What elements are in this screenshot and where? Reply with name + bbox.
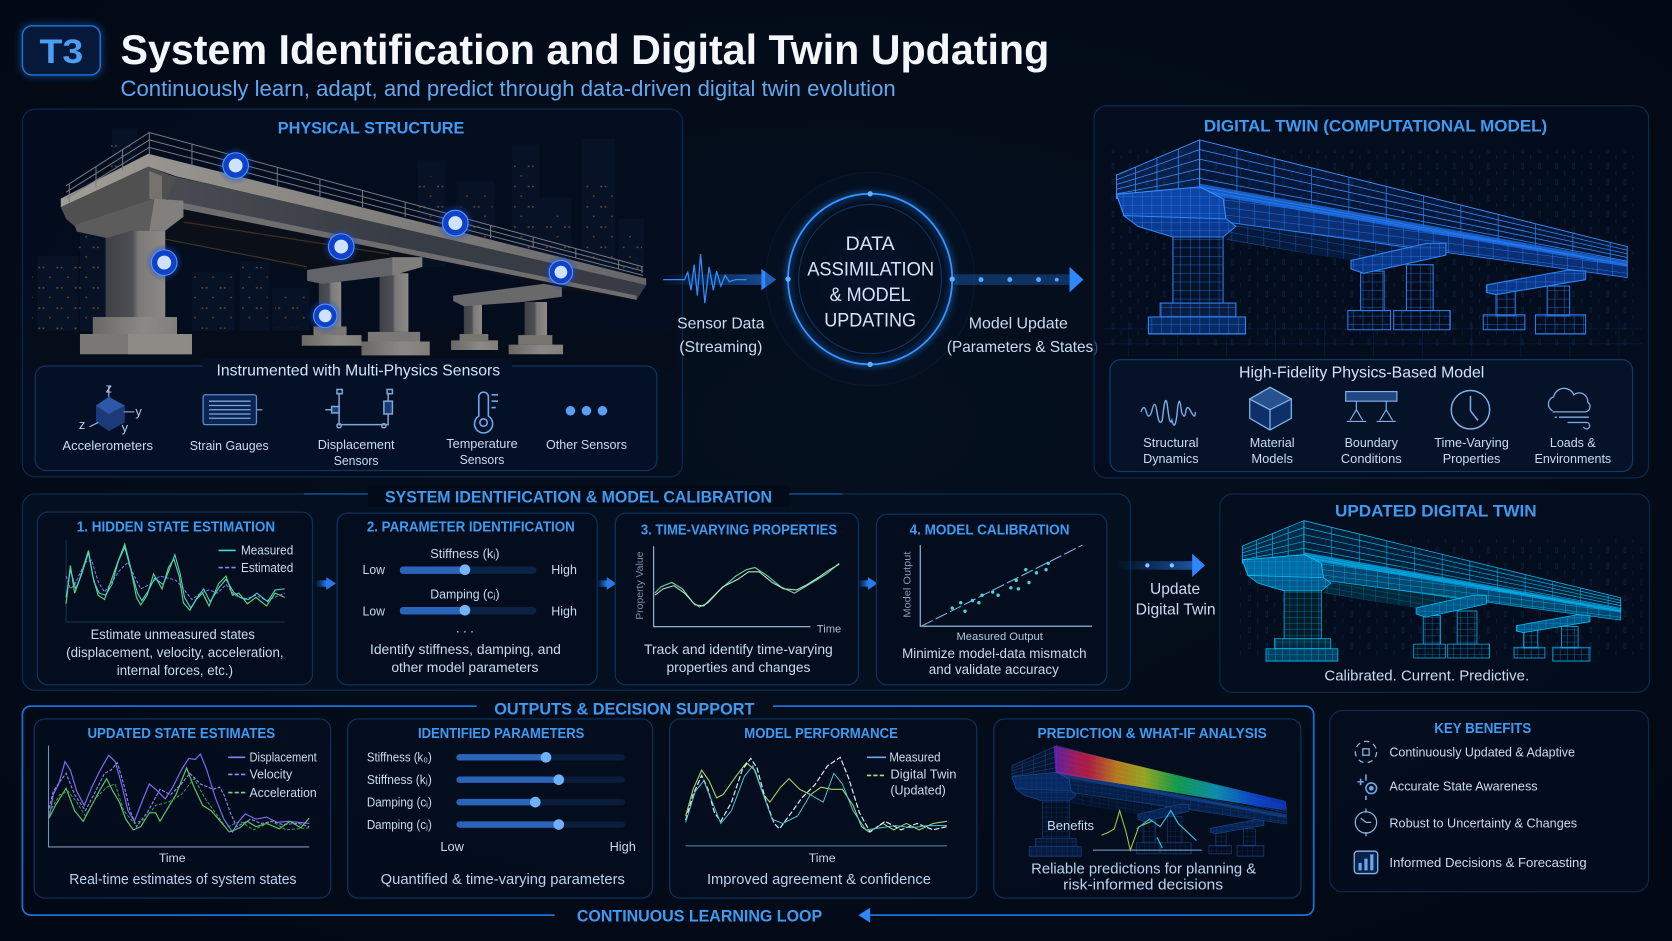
- legend: model performance: [867, 750, 956, 798]
- label: temperature sensors: Sensors: [460, 452, 505, 467]
- description: parameter identification: other model parameters: [391, 659, 539, 675]
- label: boundary conditions: [1341, 435, 1402, 466]
- label: time-varying properties: [1434, 435, 1509, 466]
- description: model calibration: [902, 645, 1087, 677]
- chart: scatter calibration: Measured Output: [956, 631, 1044, 643]
- label: strain gauges: Strain Gauges: [190, 438, 269, 453]
- panel: updated digital twin: [1220, 494, 1650, 692]
- description: model calibration: Minimize model-data mismatch: [902, 645, 1087, 661]
- panel: digital twin: [1094, 106, 1649, 478]
- icon: accelerometers: z: [106, 381, 112, 396]
- heading: updated state estimates: UPDATED STATE ESTIMATES: [87, 726, 275, 742]
- label: update digital twin: Update: [1150, 581, 1200, 598]
- legend: model performance: Measured: [889, 750, 940, 765]
- sensors box: [35, 359, 657, 470]
- label: benefits: Benefits: [1047, 818, 1094, 833]
- icon: accelerometers: z: [79, 417, 85, 432]
- heading: high-fidelity model: High-Fidelity Physics-Based Model: [1239, 365, 1484, 382]
- label: structural dynamics: [1143, 435, 1199, 466]
- slider: stiffness: Stiffness (kᵢ): [430, 546, 500, 561]
- label: update digital twin: Digital Twin: [1136, 601, 1216, 618]
- icon: other sensors: [566, 406, 607, 416]
- heading: parameter identification: 2. PARAMETER IDENTIFICATION: [367, 519, 575, 535]
- heading: updated digital twin: UPDATED DIGITAL TWIN: [1335, 501, 1537, 520]
- card: parameter identification: [337, 513, 597, 685]
- heading: system identification: SYSTEM IDENTIFICATION & MODEL CALIBRATION: [385, 487, 772, 506]
- panel: key benefits: [1330, 710, 1649, 892]
- arrow: update digital twin: [1116, 554, 1205, 577]
- card: model calibration: [877, 514, 1107, 685]
- slider: damping cj: [367, 817, 625, 832]
- label: update digital twin: [1136, 581, 1216, 618]
- icon: continuously updated: [1355, 741, 1377, 763]
- description: time-varying: Track and identify time-varying: [644, 641, 833, 657]
- slider: stiffness k0: [367, 750, 625, 765]
- label: material models: [1250, 435, 1295, 466]
- slider: damping cj: Damping (cⱼ): [367, 817, 432, 832]
- description: time-varying: properties and changes: [666, 659, 810, 675]
- high-fidelity model box: [1110, 360, 1633, 472]
- label: material models: Material: [1250, 435, 1295, 450]
- wireframe bridge: updated: [1242, 521, 1621, 661]
- slider: stiffness: Low: [363, 562, 385, 577]
- benefit: continuously updated: Continuously Updated & Adaptive: [1389, 744, 1575, 759]
- chart: time-varying property: Property Value: [635, 551, 646, 620]
- chart: model performance: [686, 757, 947, 846]
- label: boundary conditions: Boundary: [1345, 435, 1398, 450]
- icon: structural dynamics: [1141, 400, 1195, 425]
- slider: damping: Low: [363, 604, 385, 619]
- card: prediction and what-if analysis: [994, 719, 1301, 898]
- heading: outputs and decision support: OUTPUTS & DECISION SUPPORT: [494, 700, 755, 719]
- icon: loads and environments: [1548, 388, 1590, 429]
- label: material models: Models: [1251, 451, 1293, 466]
- wireframe bridge with stress gradient: [1012, 746, 1286, 856]
- label: temperature sensors: [446, 436, 518, 467]
- bridge photo: [61, 132, 646, 355]
- label: time-varying properties: Properties: [1443, 451, 1501, 466]
- description: parameter identification: [370, 641, 561, 675]
- chart: measured vs estimated: [66, 540, 285, 622]
- caption: quantified parameters: Quantified & time-varying parameters: [381, 871, 625, 888]
- heading: key benefits: KEY BENEFITS: [1434, 721, 1532, 737]
- subtitle: Continuously learn, adapt, and predict through data-driven digital twin evolution: [120, 76, 896, 101]
- caption: reliable predictions: [1031, 861, 1256, 894]
- scale: low and high: Low: [440, 839, 465, 854]
- card: hidden state estimation: [37, 512, 312, 685]
- legend: measured and estimated: Measured: [241, 543, 293, 558]
- benefit: accurate state awareness: Accurate State Awareness: [1389, 778, 1538, 793]
- description: hidden state: internal forces, etc.): [117, 662, 233, 678]
- title: System Identification and Digital Twin Updating: [120, 26, 1049, 73]
- legend: measured and estimated: Estimated: [241, 560, 293, 575]
- panel: system identification and model calibration: [22, 485, 1130, 690]
- icon: accelerometers: y: [135, 404, 142, 419]
- scale: low and high: High: [610, 839, 636, 854]
- label: sensor data: (Streaming): [679, 339, 762, 356]
- panel: physical structure: [22, 109, 682, 477]
- axis label: time: Time: [159, 851, 186, 865]
- icon: accelerometers: [79, 381, 142, 435]
- wireframe bridge model: [1116, 140, 1627, 334]
- ellipsis: . . .: [456, 621, 474, 636]
- card: updated state estimates: [34, 719, 331, 898]
- slider: damping: [363, 586, 577, 619]
- icon: clock: [1451, 391, 1490, 429]
- chart: state estimates: [49, 746, 309, 847]
- badge: T3: [22, 26, 100, 75]
- label: structural dynamics: Dynamics: [1143, 451, 1199, 466]
- label: time-varying properties: Time-Varying: [1434, 435, 1509, 450]
- chart: time-varying property: [635, 546, 841, 636]
- frame: outputs continuous loop: [22, 700, 1314, 926]
- heading: model calibration: 4. MODEL CALIBRATION: [910, 522, 1070, 538]
- heading: multi-physics sensors: Instrumented with Multi-Physics Sensors: [216, 363, 500, 380]
- hub: data assimilation and model updating: DATA: [846, 234, 895, 255]
- label: model update: Model Update: [969, 316, 1068, 333]
- legend: model performance: Digital Twin: [890, 767, 956, 782]
- caption: improved agreement: Improved agreement & confidence: [707, 871, 931, 888]
- heading: time-varying properties: 3. TIME-VARYING PROPERTIES: [641, 522, 837, 538]
- railing: [66, 132, 643, 275]
- legend: measured and estimated: [219, 543, 293, 575]
- description: hidden state: [66, 626, 284, 678]
- icon: strain gauge: [203, 395, 262, 425]
- arrow: step 3 to 4: [858, 577, 878, 590]
- hub: data assimilation and model updating: & MODEL: [830, 285, 911, 306]
- label: temperature sensors: Temperature: [446, 436, 518, 451]
- chart: time-varying property: Time: [817, 624, 841, 636]
- legend: state estimates: Velocity: [250, 767, 293, 782]
- hub: data assimilation and model updating: UPDATING: [824, 311, 916, 332]
- icon: displacement sensor: [325, 389, 392, 428]
- icon: informed decisions: [1354, 851, 1378, 874]
- benefit: informed decisions: Informed Decisions & Forecasting: [1389, 855, 1587, 870]
- what-if mini chart: [1093, 811, 1202, 850]
- legend: model performance: (Updated): [890, 783, 946, 798]
- legend: state estimates: [228, 750, 317, 800]
- chart: scatter calibration: [903, 545, 1092, 643]
- description: model calibration: and validate accuracy: [929, 661, 1059, 677]
- description: time-varying: [644, 641, 833, 675]
- description: parameter identification: Identify stiffness, damping, and: [370, 641, 561, 657]
- legend: state estimates: Acceleration: [250, 785, 317, 800]
- label: displacement sensors: Sensors: [334, 453, 379, 468]
- scale: low and high: [440, 839, 636, 854]
- label: loads and environments: Loads &: [1550, 435, 1596, 450]
- icon: robust: [1355, 809, 1377, 836]
- label: sensor data: [677, 316, 765, 356]
- label: accelerometers: Accelerometers: [62, 438, 153, 453]
- label: loads and environments: [1534, 435, 1612, 466]
- card: model performance: [670, 719, 977, 898]
- slider: stiffness kj: Stiffness (kⱼ): [367, 772, 432, 787]
- chart: scatter calibration: Model Output: [903, 551, 914, 618]
- benefit: robust to uncertainty: Robust to Uncertainty & Changes: [1389, 816, 1577, 831]
- label: structural dynamics: Structural: [1143, 435, 1199, 450]
- arrow: sensor data streaming: [659, 254, 776, 303]
- caption: reliable predictions: risk-informed decisions: [1063, 877, 1223, 894]
- heading: continuous learning loop: CONTINUOUS LEARNING LOOP: [577, 907, 822, 926]
- hub: data assimilation and model updating: ASSIMILATION: [807, 259, 934, 280]
- arrow: step 1 to 2: [316, 577, 336, 590]
- heading: digital twin: DIGITAL TWIN (COMPUTATIONAL MODEL): [1204, 116, 1547, 135]
- slider: stiffness k0: Stiffness (k₀): [367, 750, 432, 765]
- sensor markers: [145, 146, 579, 334]
- icon: thermometer: [475, 392, 498, 433]
- label: model update: [947, 316, 1098, 356]
- axis label: time: Time: [809, 851, 836, 865]
- arrow: step 2 to 3: [597, 577, 616, 590]
- slider: stiffness: [363, 546, 577, 577]
- night city skyline: [30, 128, 676, 369]
- card: time-varying properties: [615, 513, 858, 685]
- heading: model performance: MODEL PERFORMANCE: [744, 726, 898, 742]
- icon: accurate state: [1357, 774, 1377, 800]
- slider: damping: High: [551, 604, 577, 619]
- caption: calibrated current predictive: Calibrated. Current. Predictive.: [1324, 668, 1529, 685]
- label: other sensors: Other Sensors: [546, 437, 627, 452]
- heading: prediction and what-if: PREDICTION & WHAT-IF ANALYSIS: [1038, 726, 1267, 742]
- hub: data assimilation and model updating: [766, 172, 975, 386]
- label: loads and environments: Environments: [1534, 451, 1612, 466]
- label: displacement sensors: Displacement: [318, 437, 395, 452]
- label: boundary conditions: Conditions: [1341, 451, 1402, 466]
- slider: stiffness: High: [551, 562, 577, 577]
- icon: material cube: [1250, 387, 1291, 430]
- slider: damping: Damping (cⱼ): [430, 586, 500, 601]
- heading: hidden state estimation: 1. HIDDEN STATE ESTIMATION: [77, 519, 275, 535]
- icon: accelerometers: y: [122, 420, 129, 435]
- description: hidden state: (displacement, velocity, acceleration,: [66, 644, 284, 660]
- caption: real-time estimates: Real-time estimates of system states: [69, 871, 296, 888]
- caption: reliable predictions: Reliable predictions for planning &: [1031, 861, 1256, 878]
- heading: identified parameters: IDENTIFIED PARAMETERS: [418, 726, 585, 742]
- icon: boundary conditions: [1346, 392, 1397, 421]
- slider: damping ci: [367, 794, 625, 809]
- badge: T3: T3: [39, 33, 83, 71]
- label: displacement sensors: [318, 437, 395, 468]
- arrow: loop back: [858, 908, 870, 923]
- legend: state estimates: Displacement: [250, 750, 317, 765]
- slider: damping ci: Damping (cᵢ): [367, 794, 432, 809]
- card: identified parameters: [348, 719, 653, 898]
- slider: stiffness kj: [367, 772, 625, 787]
- label: sensor data: Sensor Data: [677, 316, 765, 333]
- label: model update: (Parameters & States): [947, 339, 1098, 356]
- heading: physical structure: PHYSICAL STRUCTURE: [278, 119, 464, 138]
- description: hidden state: Estimate unmeasured states: [91, 626, 255, 642]
- arrow: model update: [954, 267, 1083, 292]
